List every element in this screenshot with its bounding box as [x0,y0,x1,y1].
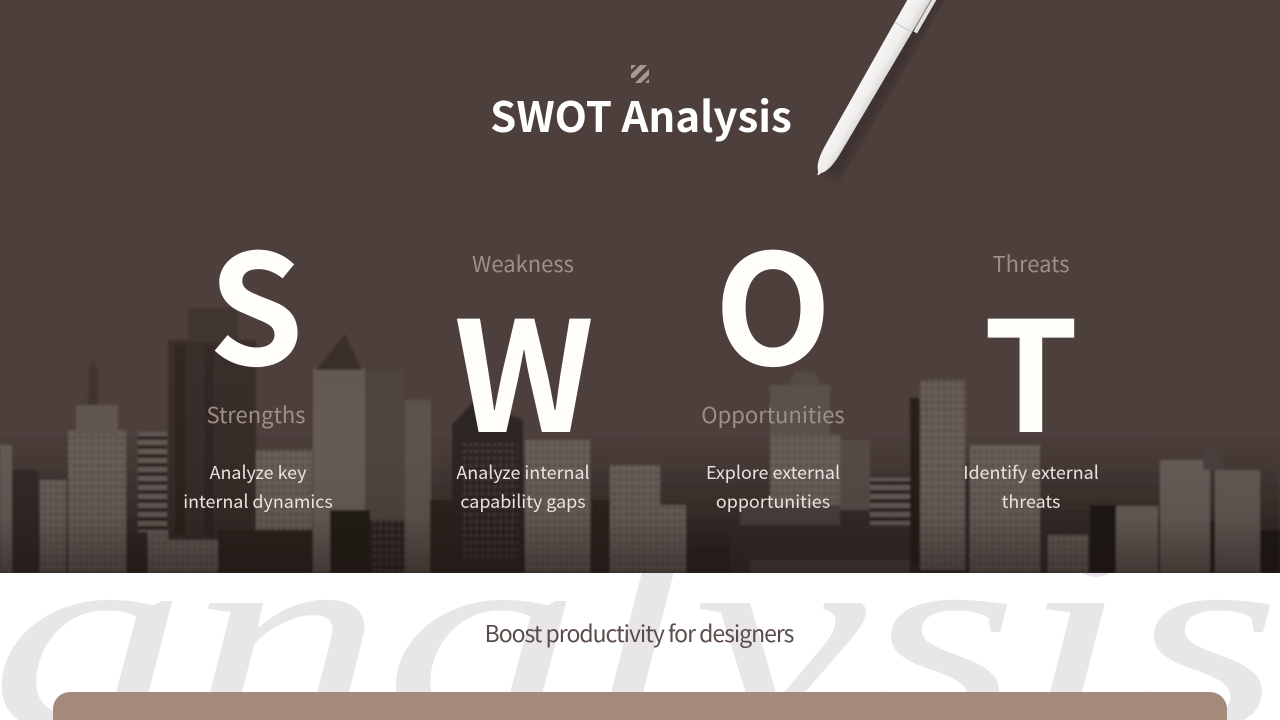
description: Identify external [963,459,1099,485]
description: threats [1002,488,1060,514]
far left buildings [0,445,12,573]
letter S: S [208,189,304,410]
icon: pen [818,0,943,177]
label Opportunities: Opportunities [701,398,845,430]
label Strengths: Strengths [206,398,306,430]
column: Opportunities [701,189,845,514]
label Threats: Threats [992,247,1070,279]
big dark tower [168,340,256,540]
panel: dark skyline hero [0,0,1280,573]
title: SWOT Analysis [490,84,792,145]
icon: striped square [631,65,649,83]
far right blocks [1090,505,1118,573]
tall right tower [910,398,924,563]
description: internal dynamics [183,488,333,514]
letter W: W [454,256,594,477]
description [706,459,840,514]
description: capability gaps [460,488,586,514]
description [183,459,333,514]
spire tower [68,430,126,573]
distant haze buildings [0,430,1280,573]
description: Analyze internal [456,459,590,485]
description: Analyze key [210,459,306,485]
description: Explore external [706,459,840,485]
label Weakness: Weakness [472,247,574,279]
description [456,459,590,514]
centre buildings [660,505,686,573]
dark pointed tower [452,400,523,573]
panel: bottom card [53,692,1227,720]
description: opportunities [716,488,830,514]
column: Threats [963,247,1099,514]
letter O: O [714,189,832,410]
skyline photo [0,308,1280,573]
subtitle: Boost productivity for designers [485,615,793,649]
letter T: T [983,256,1079,477]
column: Weakness [454,247,594,514]
twin tower with pyramid top [313,368,365,573]
column: Strengths [183,189,333,514]
description [963,459,1099,514]
